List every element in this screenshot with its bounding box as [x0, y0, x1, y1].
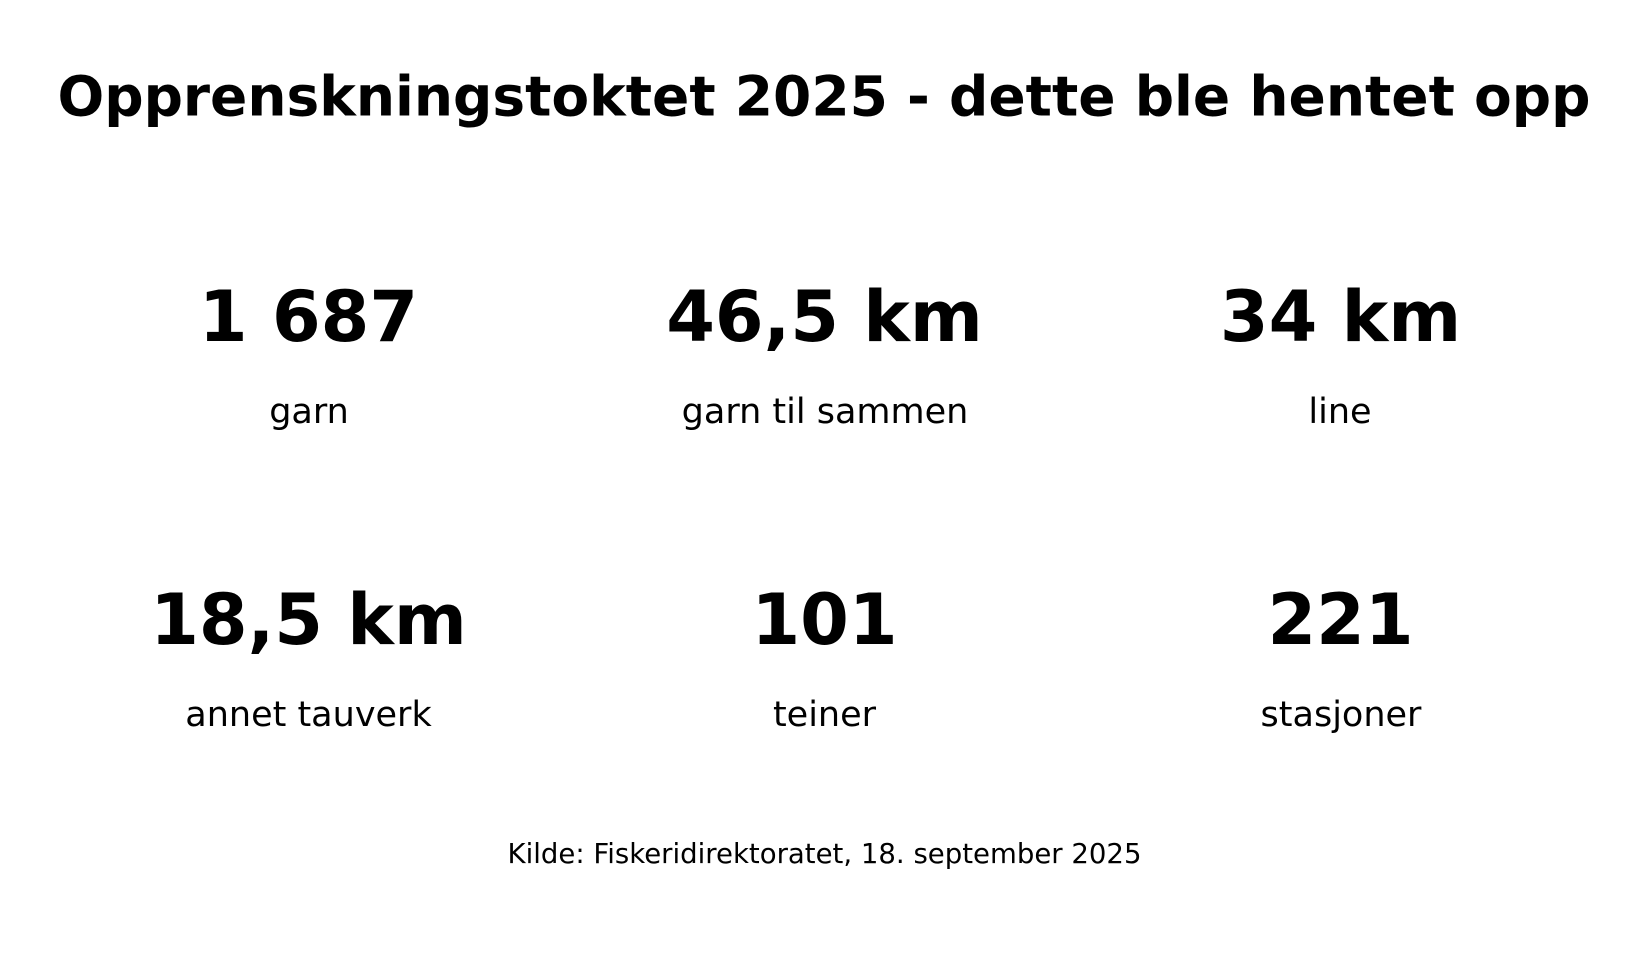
- stat: garn: [199, 276, 418, 432]
- number: 34 km: 34 km: [1220, 276, 1461, 358]
- number: 1 687: 1 687: [199, 276, 418, 358]
- number: 18,5 km: 18,5 km: [150, 579, 467, 661]
- stat: stasjoner: [1261, 579, 1422, 735]
- label: garn: garn: [269, 392, 349, 432]
- label: garn til sammen: garn til sammen: [682, 392, 968, 432]
- stat: teiner: [751, 579, 898, 735]
- label: teiner: teiner: [773, 695, 877, 735]
- label: line: line: [1308, 392, 1372, 432]
- label: annet tauverk: annet tauverk: [185, 695, 432, 735]
- number: 101: 101: [751, 579, 898, 661]
- number: 221: 221: [1267, 579, 1414, 661]
- label: stasjoner: stasjoner: [1261, 695, 1422, 735]
- source note: Kilde: Fiskeridirektoratet, 18. september 2025: [508, 837, 1142, 870]
- number: 46,5 km: 46,5 km: [666, 276, 983, 358]
- stat: garn til sammen: [666, 276, 983, 432]
- title: Opprenskningstoktet 2025 - dette ble hentet opp: [57, 64, 1591, 128]
- stat: line: [1220, 276, 1461, 432]
- stat: annet tauverk: [150, 579, 467, 735]
